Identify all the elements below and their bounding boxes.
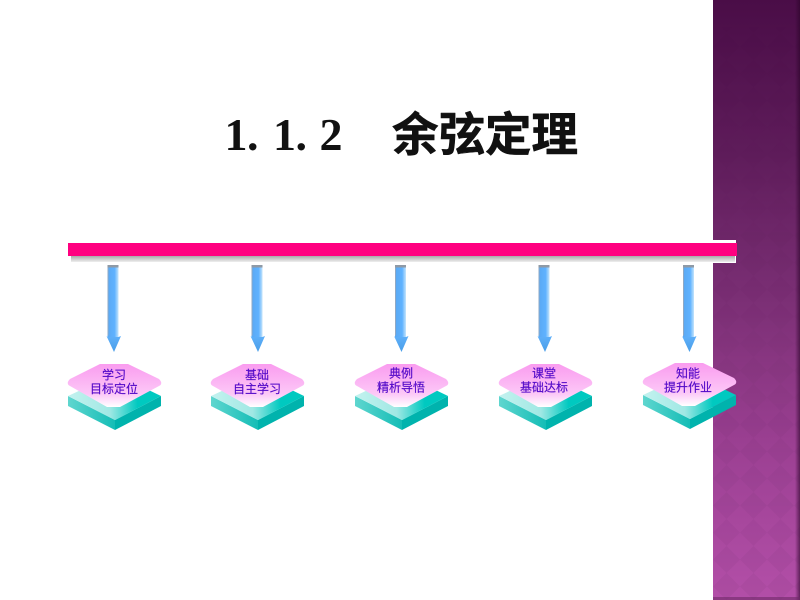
label 4: 基础达标	[520, 380, 568, 394]
hexagon 1	[68, 364, 161, 407]
hexagon 2	[211, 364, 304, 407]
arrow 4	[538, 265, 552, 352]
sidebar panel	[713, 0, 800, 600]
layered base 2	[211, 382, 304, 430]
hexagon 4	[499, 364, 592, 407]
title: 2	[320, 109, 342, 160]
layered base 4	[499, 382, 592, 430]
arrow 1	[106, 265, 121, 352]
label 1: 目标定位	[90, 381, 138, 396]
layered base 5	[643, 381, 736, 429]
label 3: 典例	[389, 366, 413, 380]
item 3: 典例精析导悟	[355, 265, 448, 430]
arrow 2	[250, 265, 265, 352]
title: 1	[273, 109, 296, 160]
horizontal pink bar	[68, 240, 737, 263]
title	[224, 109, 578, 161]
arrow 3	[394, 265, 408, 352]
hexagon 3	[355, 364, 448, 407]
arrow 5	[682, 265, 696, 352]
item 4: 课堂基础达标	[499, 265, 592, 430]
hexagon 5	[643, 363, 736, 406]
title: .	[296, 109, 307, 160]
label 1: 学习	[102, 367, 126, 382]
label 2: 基础	[245, 368, 269, 382]
title: 1	[224, 109, 248, 160]
title: 余弦定理	[392, 109, 578, 161]
item 1: 学习目标定位	[68, 265, 161, 430]
label 3: 精析导悟	[377, 380, 425, 394]
label 5: 提升作业	[664, 380, 712, 394]
layered base 1	[68, 382, 161, 430]
title: .	[247, 109, 258, 160]
item 2: 基础自主学习	[211, 265, 304, 430]
item 5: 知能提升作业	[643, 265, 736, 429]
label 4: 课堂	[532, 366, 556, 380]
layered base 3	[355, 382, 448, 430]
label 2: 自主学习	[233, 381, 281, 396]
label 5: 知能	[676, 366, 700, 380]
